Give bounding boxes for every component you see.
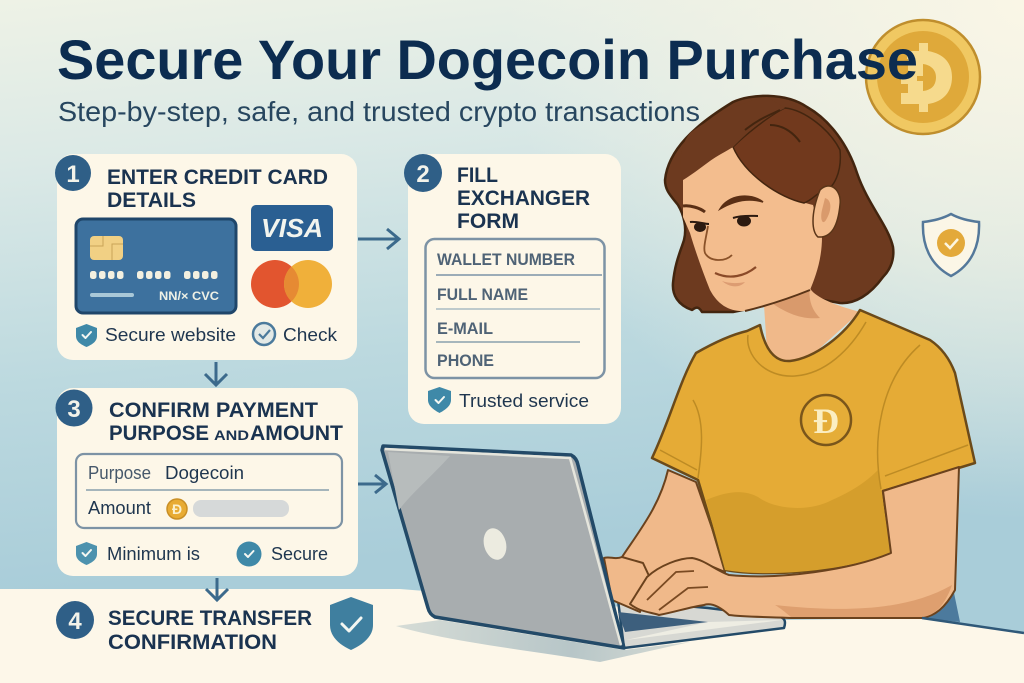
arrow: step 1 to step 2 <box>358 229 399 249</box>
hair back <box>665 96 893 312</box>
face <box>683 147 822 311</box>
facial features <box>683 196 763 286</box>
credit card <box>76 219 236 313</box>
step number 4: 4 <box>68 608 82 635</box>
subtitle: Step-by-step, safe, and trusted crypto transactions <box>58 96 700 127</box>
arrow: step 3 to step 4 <box>206 578 228 600</box>
table shadow <box>396 620 690 662</box>
laptop lid <box>382 446 624 648</box>
minimum badge <box>76 542 200 565</box>
purpose and amount box <box>76 454 342 528</box>
trusted service badge <box>428 387 589 413</box>
heading: step 1: ENTER CREDIT CARD <box>107 165 328 189</box>
forearm and front hand <box>630 467 959 618</box>
form fields: PHONE <box>437 351 494 370</box>
secure website badge <box>76 324 236 347</box>
panel: step 1 credit card <box>55 154 357 360</box>
mastercard logo <box>251 260 332 308</box>
arrow: step 3 to laptop <box>358 475 386 493</box>
secure badge: Secure <box>271 544 328 564</box>
purpose and amount box: Purpose <box>88 463 151 483</box>
step 4 secure transfer <box>56 597 373 654</box>
step number 1: 1 <box>66 161 80 188</box>
heading: step 4: SECURE TRANSFER <box>108 606 312 630</box>
heading: step 2: FILL <box>457 163 498 187</box>
neck <box>763 282 860 366</box>
table edge right <box>922 618 1024 633</box>
heading: step 2: FORM <box>457 209 519 233</box>
heading: step 3: PURPOSE <box>109 421 209 445</box>
t-shirt <box>652 310 975 573</box>
small coin: Đ <box>172 501 182 517</box>
title: Secure Your Dogecoin Purchase <box>57 28 918 91</box>
logo on shirt <box>801 395 851 445</box>
visa logo: VISA <box>261 213 323 243</box>
left hand <box>604 557 650 612</box>
logo on shirt: Đ <box>813 401 839 441</box>
check badge <box>253 323 338 345</box>
form fields: E-MAIL <box>437 319 493 338</box>
secure website badge: Secure website <box>105 325 236 345</box>
check badge: Check <box>283 325 338 345</box>
heading: step 1: DETAILS <box>107 188 196 212</box>
arrow: step 1 to step 3 <box>205 362 227 385</box>
table surface <box>0 589 1024 683</box>
minimum badge: Minimum is <box>107 544 200 564</box>
step number 1 <box>55 155 91 191</box>
purpose and amount box: Amount <box>88 498 151 518</box>
ear <box>813 186 840 237</box>
illustration: woman at laptop <box>382 96 1024 662</box>
form fields: WALLET NUMBER <box>437 250 575 269</box>
form fields <box>426 239 604 378</box>
credit card: NN/× CVC <box>159 291 219 303</box>
heading: step 3: AMOUNT <box>250 421 343 445</box>
panel: step 2 exchanger form <box>404 154 621 424</box>
arm: her right arm <box>622 470 725 585</box>
trusted service badge: Trusted service <box>459 391 589 411</box>
visa logo <box>251 205 333 251</box>
icon: large shield <box>330 597 373 650</box>
heading: step 3: CONFIRM PAYMENT <box>109 398 318 422</box>
step number 2 <box>404 154 442 192</box>
heading: step 4: CONFIRMATION <box>108 630 277 654</box>
heading: step 3: AND <box>214 427 249 443</box>
gold coin <box>866 20 980 134</box>
small coin <box>167 499 187 519</box>
keyboard <box>618 612 708 632</box>
jeans sliver <box>922 588 960 622</box>
step number 3: 3 <box>67 396 81 423</box>
step number 2: 2 <box>416 161 430 188</box>
front hair <box>733 108 840 203</box>
form fields: FULL NAME <box>437 285 528 304</box>
secure badge <box>236 542 328 566</box>
purpose and amount box: Dogecoin <box>165 463 244 483</box>
icon: shield with gold check <box>923 214 979 276</box>
step number 3 <box>56 390 92 426</box>
panel: step 3 confirm payment <box>56 388 358 576</box>
laptop base <box>618 600 785 648</box>
step number 4 <box>56 601 94 639</box>
heading: step 2: EXCHANGER <box>457 186 590 210</box>
